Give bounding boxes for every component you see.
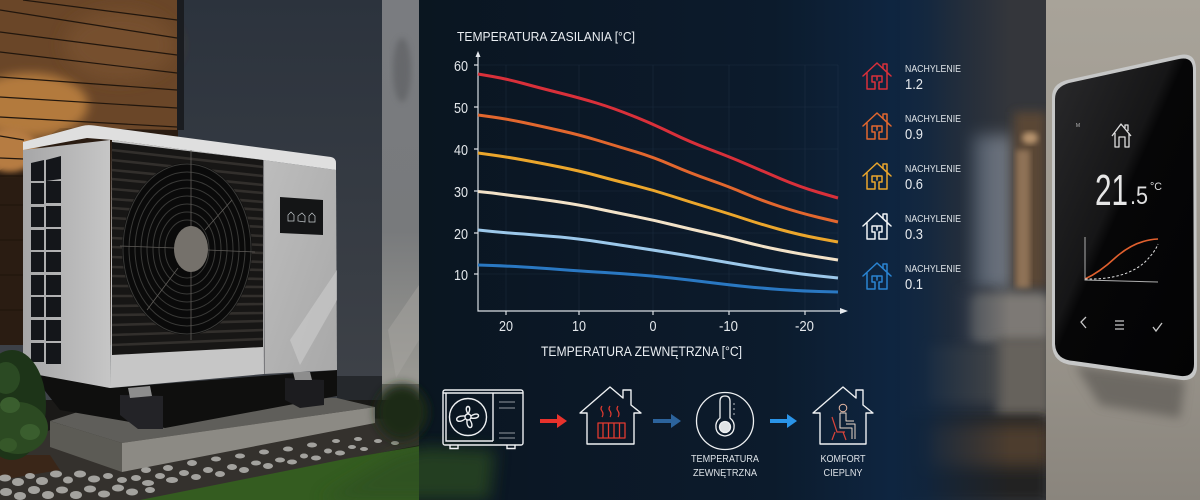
curve: lowest blue <box>478 265 838 292</box>
label: outdoor temperature: TEMPERATURA <box>691 453 759 465</box>
thermostat <box>1052 55 1197 418</box>
legend item 0.3 <box>863 213 961 243</box>
icon: house with radiator <box>580 387 641 444</box>
label: thermal comfort: KOMFORT <box>820 453 866 465</box>
x axis labels: 20 <box>499 319 513 335</box>
dark navy infographic panel <box>320 0 891 500</box>
concrete pillar <box>337 0 419 414</box>
y axis labels: 10 <box>454 268 468 284</box>
legend item 0.9: NACHYLENIE <box>905 113 961 125</box>
thermostat status mark: M <box>1076 123 1080 129</box>
legend item 0.9 <box>863 113 961 143</box>
fan hub <box>174 226 208 272</box>
background: photo wall left <box>0 0 440 500</box>
y axis labels <box>454 59 468 284</box>
process flow <box>443 387 873 479</box>
ground: grass, slab and stones <box>0 395 540 500</box>
curve: slope 0.6 <box>478 153 838 242</box>
legend item 0.6 <box>863 163 961 193</box>
y axis labels: 60 <box>454 59 468 75</box>
icon: thermometer <box>696 392 754 450</box>
unit shadow and feet <box>30 370 337 429</box>
curve: slope 1.2 <box>478 74 838 198</box>
legend item 0.6: 0.6 <box>905 176 923 193</box>
y axis labels: 20 <box>454 227 468 243</box>
label: outdoor temperature: ZEWNĘTRZNA <box>693 467 757 479</box>
x axis title: TEMPERATURA ZEWNĘTRZNA [°C] <box>541 343 742 359</box>
interior room with blurred sofa <box>890 0 1050 500</box>
unit control panel <box>280 197 323 235</box>
label: thermal comfort: CIEPLNY <box>824 467 862 479</box>
legend item 0.9: 0.9 <box>905 126 923 143</box>
curve: slope 0.3 <box>478 192 838 260</box>
curve: slope 0.9 <box>478 115 838 222</box>
legend item 1.2: NACHYLENIE <box>905 63 961 75</box>
thermostat house icon <box>1112 124 1131 147</box>
legend item 0.6: NACHYLENIE <box>905 163 961 175</box>
legend item 0.1: NACHYLENIE <box>905 263 961 275</box>
arrow: dark blue <box>653 414 681 428</box>
label: thermal comfort <box>820 453 866 479</box>
arrow: red <box>540 414 567 428</box>
x axis labels: 0 <box>650 319 656 335</box>
thermostat curve chart <box>1085 237 1158 282</box>
chart: supply temperature vs outdoor temperature <box>454 29 848 359</box>
thermostat: °C <box>1150 181 1162 193</box>
y axis labels: 40 <box>454 143 468 159</box>
grass <box>140 440 540 500</box>
right wall <box>1046 0 1200 500</box>
thermostat: .5 <box>1130 182 1148 210</box>
x axis labels: 10 <box>572 319 586 335</box>
legend item 0.1: 0.1 <box>905 276 923 293</box>
y axis title: TEMPERATURA ZASILANIA [°C] <box>457 29 635 44</box>
thermostat buttons <box>1081 317 1162 331</box>
unit casing <box>23 125 337 388</box>
fan grille <box>112 142 263 355</box>
x axis labels: -20 <box>795 319 814 335</box>
arrow: bright blue <box>770 414 797 428</box>
shrubs <box>0 350 48 460</box>
concrete slab <box>50 395 375 472</box>
legend item 1.2 <box>863 63 961 93</box>
thermostat temperature: 21 <box>1095 166 1128 215</box>
icon: house with seated person <box>813 387 873 444</box>
y axis labels: 30 <box>454 185 468 201</box>
label: outdoor temperature <box>691 453 759 479</box>
icon: heat pump <box>443 390 523 448</box>
x axis labels <box>499 319 814 335</box>
x axis labels: -10 <box>719 319 738 335</box>
grid <box>478 65 838 310</box>
axes <box>474 51 848 315</box>
y axis labels: 50 <box>454 101 468 117</box>
legend <box>863 63 961 293</box>
legend item 0.3: 0.3 <box>905 226 923 243</box>
curve: slope 0.1 light blue <box>478 230 838 278</box>
wood cladding <box>0 0 178 345</box>
side louvres <box>31 156 61 364</box>
legend item 1.2: 1.2 <box>905 76 923 93</box>
legend item 0.1 <box>863 263 961 293</box>
stones <box>0 437 399 500</box>
legend item 0.3: NACHYLENIE <box>905 213 961 225</box>
heat pump outdoor unit <box>23 125 337 429</box>
